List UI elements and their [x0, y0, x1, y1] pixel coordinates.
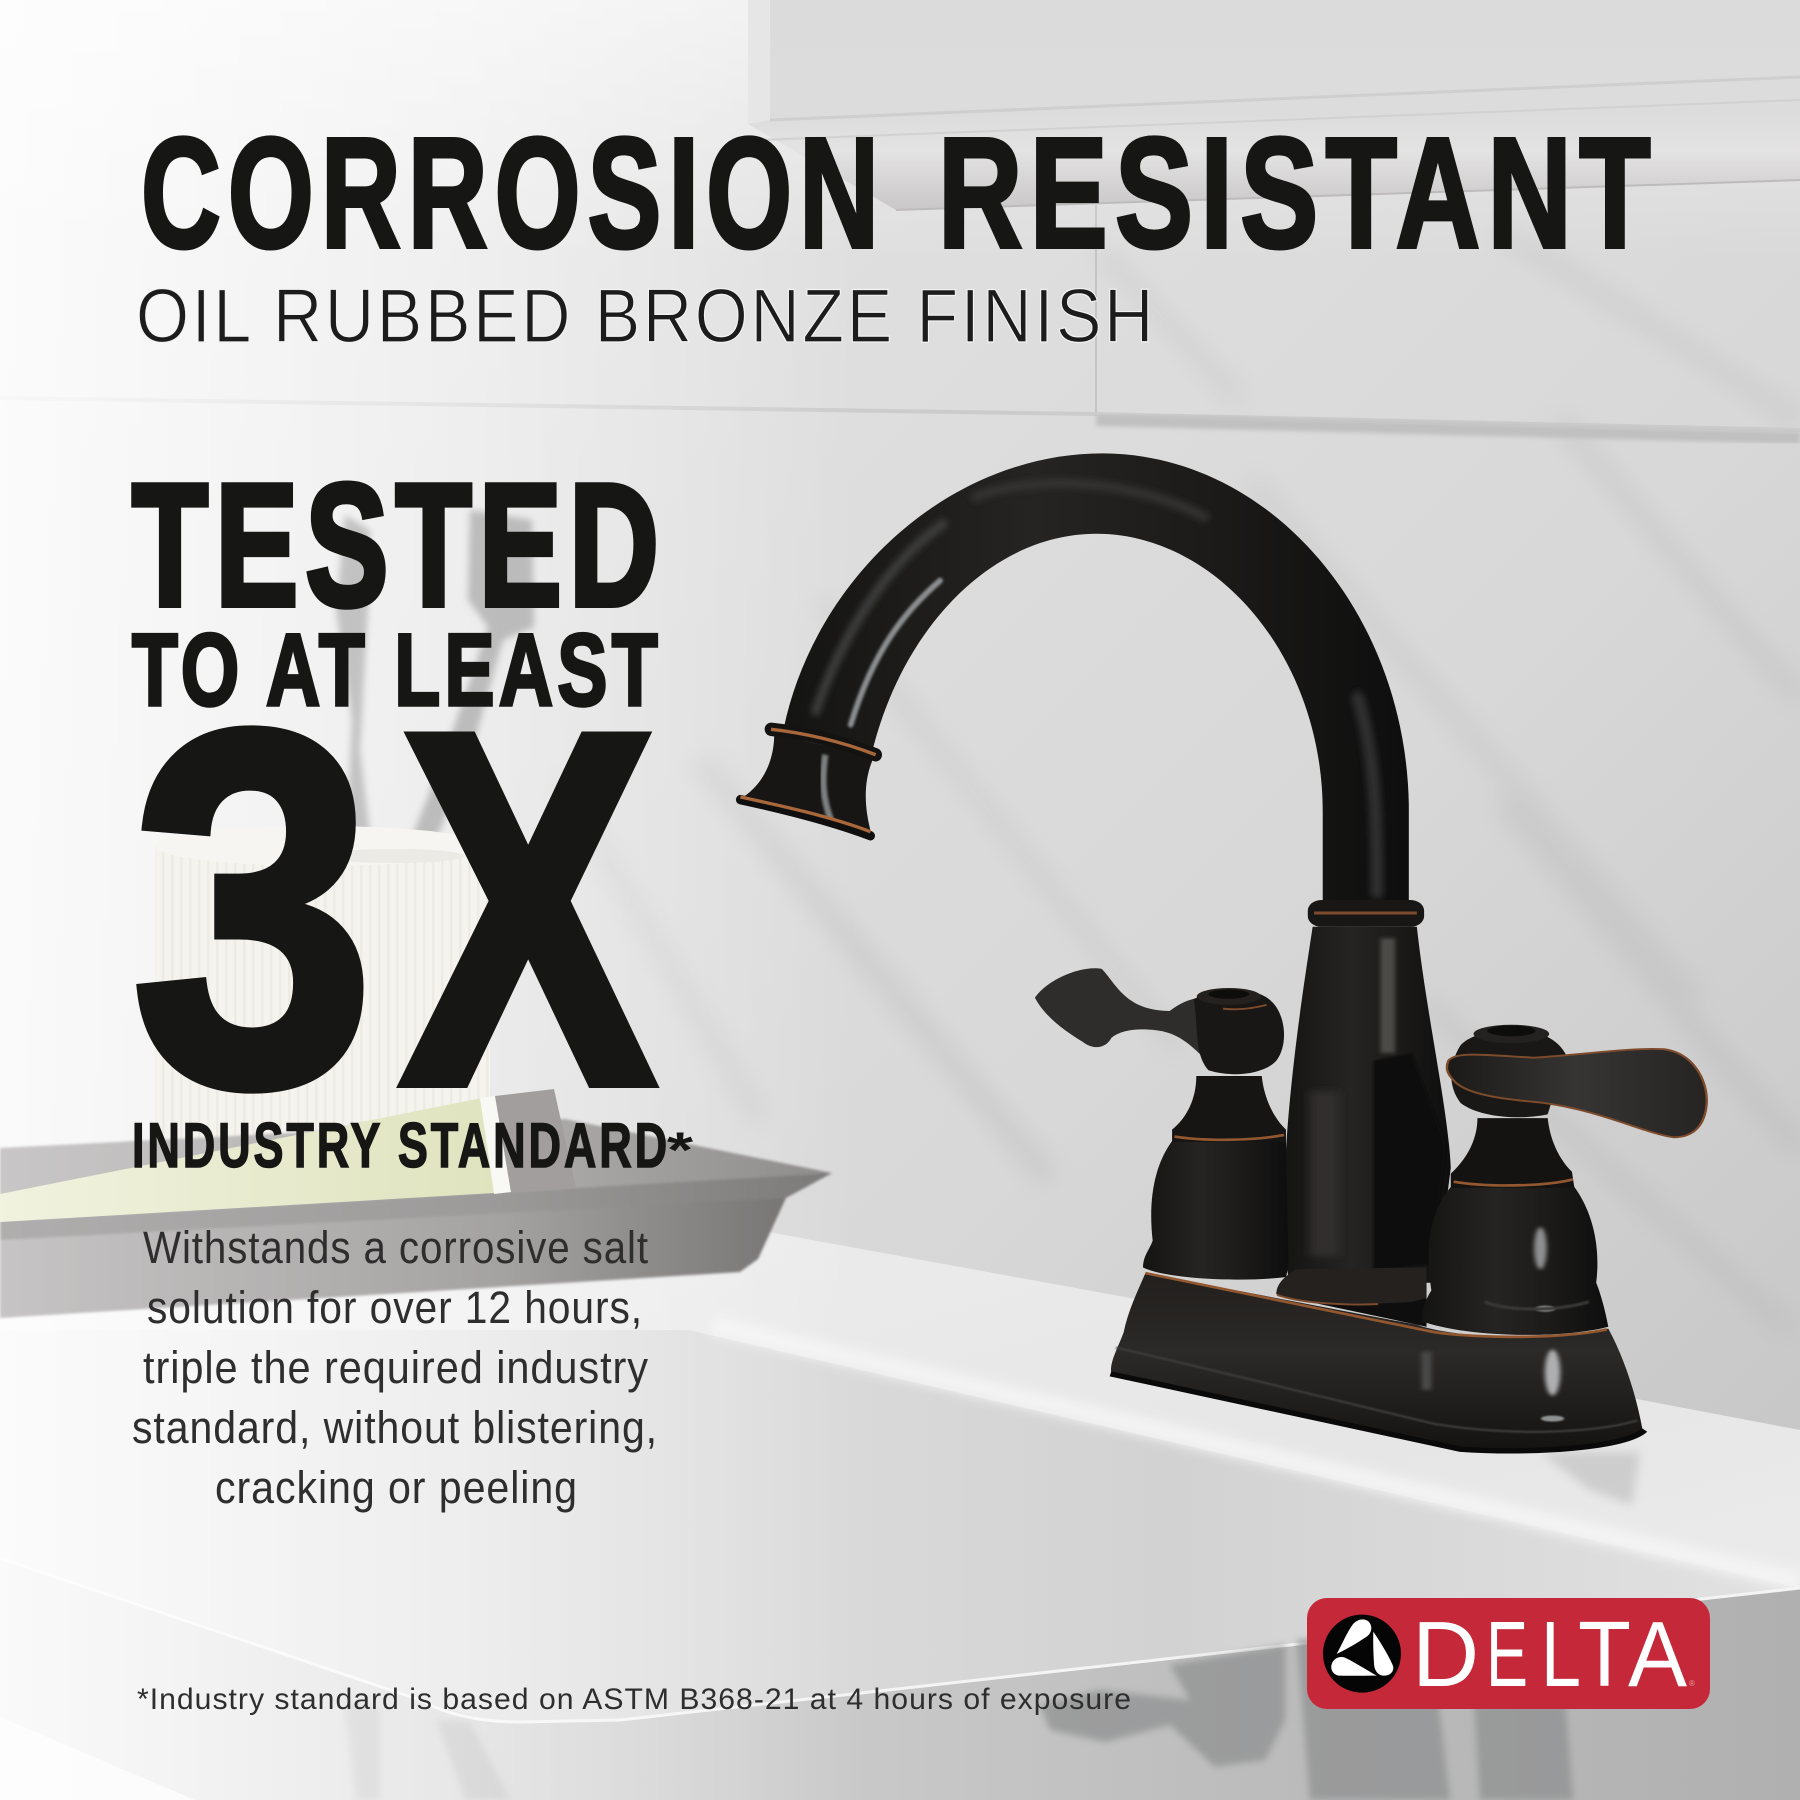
claim: tested to at least 3X: TO AT LEAST — [132, 613, 662, 727]
tile seams — [0, 205, 1800, 438]
left valve and lever — [1035, 968, 1288, 1280]
body description: Withstands a corrosive salt — [143, 1222, 649, 1273]
Delta logo — [1307, 1598, 1710, 1709]
claim: tested to at least 3X — [131, 447, 694, 1191]
wordmark: T — [1578, 1602, 1631, 1706]
body description: solution for over 12 hours, — [147, 1282, 643, 1333]
spout and nozzle — [739, 453, 1409, 907]
claim: tested to at least 3X: 3 — [131, 627, 375, 1191]
icon: Delta triangle mark — [1323, 1615, 1401, 1693]
marble veins on wall — [560, 230, 1800, 1330]
toothpaste tube — [0, 1089, 576, 1222]
toothbrush holder cup — [155, 826, 490, 1146]
wordmark — [1412, 1602, 1687, 1706]
body description: cracking or peeling — [215, 1462, 578, 1513]
base, valves and levers — [1035, 900, 1707, 1451]
riser body — [1284, 900, 1451, 1283]
faucet reflection on counter — [1540, 1452, 1640, 1505]
wordmark: L — [1541, 1602, 1581, 1706]
right valve and lever — [1422, 1025, 1707, 1335]
claim: tested to at least 3X: TESTED — [132, 447, 666, 642]
wordmark: D — [1412, 1602, 1479, 1706]
claim: tested to at least 3X: X — [404, 632, 654, 1185]
wordmark: E — [1486, 1602, 1528, 1706]
subtitle: OIL RUBBED BRONZE FINISH — [136, 274, 1156, 359]
body description — [132, 1222, 658, 1513]
footnote: *Industry standard is based on ASTM B368-21 at 4 hours of exposure — [137, 1683, 1132, 1716]
wordmark: A — [1628, 1602, 1687, 1706]
title: CORROSION — [141, 106, 886, 281]
claim: tested to at least 3X: * — [667, 1122, 694, 1178]
faucet — [739, 453, 1707, 1451]
under-counter area with pipe shadows — [0, 1558, 1800, 1800]
Delta logo: ® — [1689, 1679, 1695, 1688]
crown molding — [748, 0, 1800, 210]
riser foot — [1276, 1267, 1427, 1304]
toothbrushes — [336, 510, 534, 860]
claim: tested to at least 3X: INDUSTRY STANDARD — [132, 1111, 670, 1181]
body description: triple the required industry — [143, 1342, 649, 1393]
soap tray — [0, 1119, 832, 1318]
title — [141, 106, 1658, 281]
body description: standard, without blistering, — [132, 1402, 658, 1453]
countertop — [0, 1228, 1800, 1722]
base plate — [1111, 1267, 1645, 1451]
